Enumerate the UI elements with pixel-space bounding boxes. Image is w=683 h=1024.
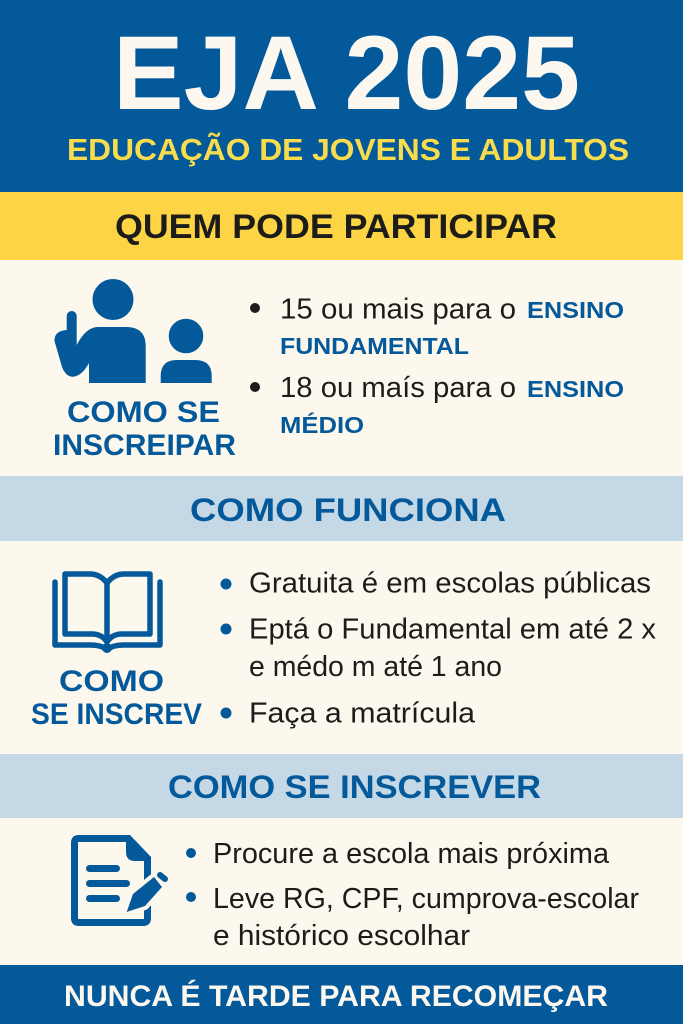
bullet list: how it works: Faça a matrícula <box>249 698 476 730</box>
heading band: quem pode participar: QUEM PODE PARTICIPAR <box>115 208 557 246</box>
bullet list: age requirements: 18 ou maís para o <box>280 372 516 404</box>
icon: adult raising finger with child <box>54 279 212 383</box>
subtitle: EDUCAÇÃO DE JOVENS E ADULTOS <box>67 132 629 167</box>
title: EJA 2025 <box>113 15 580 132</box>
heading band: como funciona <box>0 476 683 541</box>
bullet list: how it works: Eptá o Fundamental em até 2 x <box>249 614 656 646</box>
label: como se inscreipar: INSCREIPAR <box>53 429 236 462</box>
heading band: quem pode participar <box>0 192 683 260</box>
bullet list: how to enrol <box>186 838 639 952</box>
panel: como funciona <box>0 476 683 754</box>
bullet list: age requirements: ENSINO <box>527 376 624 402</box>
heading band: como funciona: COMO FUNCIONA <box>190 492 506 528</box>
label: como se inscrev: SE INSCREV <box>31 698 202 731</box>
label: como se inscrev <box>31 665 202 731</box>
bullet list: how it works: Gratuita é em escolas públicas <box>249 568 651 600</box>
bullet list: how it works: e médo m até 1 ano <box>249 651 502 683</box>
bullet list: how it works <box>220 568 656 730</box>
label: como se inscreipar: COMO SE <box>67 396 220 429</box>
bullet list: age requirements: MÉDIO <box>280 411 364 438</box>
footer banner: NUNCA É TARDE PARA RECOMEÇAR <box>64 979 608 1013</box>
bullet list: age requirements <box>250 294 624 438</box>
label: como se inscreipar <box>53 396 236 462</box>
bullet list: how to enrol: Procure a escola mais próxima <box>213 838 610 870</box>
panel: quem pode participar <box>0 192 683 476</box>
panel: como se inscrever <box>0 754 683 965</box>
icon: document and pencil <box>71 835 165 926</box>
bullet list: age requirements: ENSINO <box>527 297 624 323</box>
bullet list: how to enrol: e histórico escolhar <box>213 920 470 952</box>
heading band: como se inscrever: COMO SE INSCREVER <box>168 769 541 805</box>
icon: open book <box>55 574 160 651</box>
heading band: como se inscrever <box>0 754 683 818</box>
header panel <box>0 0 683 192</box>
bullet list: age requirements: FUNDAMENTAL <box>280 333 469 359</box>
label: como se inscrev: COMO <box>59 665 164 698</box>
bullet list: how to enrol: Leve RG, CPF, cumprova-escolar <box>213 883 639 915</box>
bullet list: age requirements: 15 ou mais para o <box>280 294 516 326</box>
footer banner <box>0 965 683 1024</box>
